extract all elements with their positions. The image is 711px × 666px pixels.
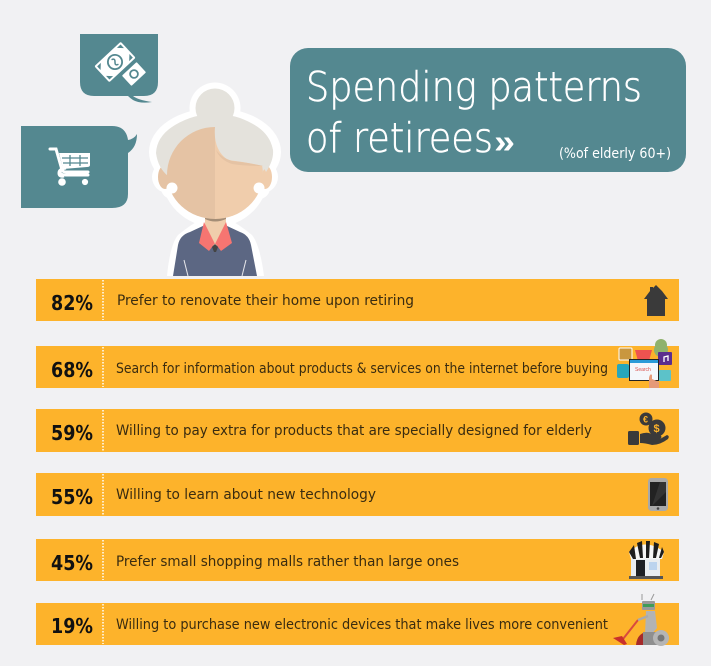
row: 68%: 68%: [51, 358, 93, 382]
icon: shopping cart: [50, 149, 90, 186]
heading chevrons: »: [494, 123, 515, 160]
icon: smartphone: [648, 478, 668, 511]
row: 45%: [36, 539, 679, 581]
speech bubble: money: [80, 34, 158, 103]
row: 45%: 45%: [51, 551, 93, 575]
row: 19%: [36, 594, 679, 646]
icon: hand holding coins: [628, 412, 669, 445]
earrings: [166, 182, 178, 194]
row: 19%: 19%: [51, 614, 93, 638]
row: 45%: Prefer small shopping malls rather than large ones: [116, 554, 459, 570]
hair bun: [196, 88, 234, 128]
speech bubble: shopping: [21, 126, 137, 208]
row: 55%: 55%: [51, 485, 93, 509]
icon: house: [644, 285, 668, 316]
row: 82%: 82%: [51, 291, 93, 315]
row: 82%: [36, 279, 679, 321]
icon: robot vacuum: [613, 594, 669, 646]
icon: internet search with apps: Search: [635, 367, 651, 373]
row: 55%: [36, 473, 679, 516]
hair fringe: [215, 118, 273, 172]
row: 55%: Willing to learn about new technology: [116, 487, 377, 503]
icon: hand holding coins: €: [643, 414, 648, 424]
row: 59%: Willing to pay extra for products that are specially designed for elderly: [116, 423, 593, 439]
elderly woman figure: [149, 82, 281, 276]
white outline: [149, 82, 281, 276]
row: 59%: 59%: [51, 421, 93, 445]
icon: banknotes: [94, 42, 146, 86]
subtitle: (%of elderly 60+): [559, 146, 671, 162]
title panel: [290, 48, 686, 172]
row: 82%: Prefer to renovate their home upon retiring: [117, 293, 414, 309]
heading: Spending patterns: [306, 63, 642, 111]
row: 59%: [36, 409, 679, 452]
collar: [199, 222, 232, 251]
icon: shop: [629, 541, 664, 579]
row: 68%: Search for information about products & services on the internet before buying: [116, 361, 608, 377]
body: [173, 225, 257, 276]
row: 19%: Willing to purchase new electronic devices that make lives more convenient: [116, 617, 608, 633]
icon: internet search with apps: [617, 339, 672, 388]
face: [167, 127, 215, 219]
neck: [205, 217, 226, 248]
hair: [156, 114, 273, 178]
row: 68%: [36, 339, 679, 388]
ears: [158, 165, 172, 189]
icon: hand holding coins: $: [654, 423, 660, 435]
heading line 2: of retirees: [306, 114, 493, 162]
